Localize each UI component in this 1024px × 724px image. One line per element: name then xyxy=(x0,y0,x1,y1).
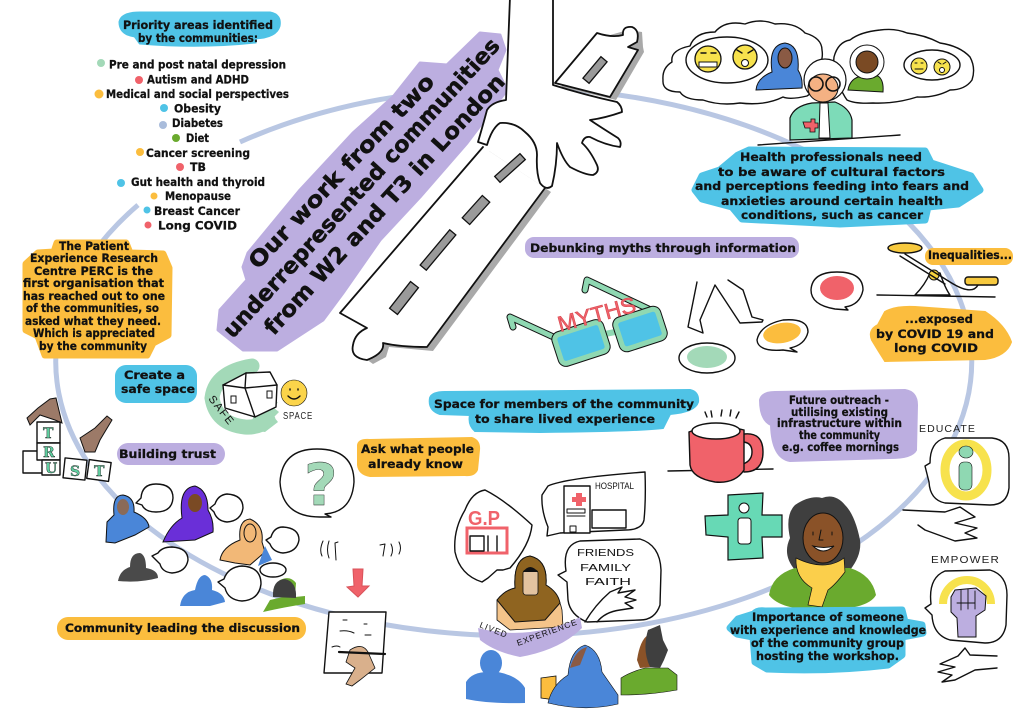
lived experience banner: EXPERIENCE xyxy=(515,617,579,648)
red down arrow xyxy=(347,569,369,597)
create a safe space label: safe space xyxy=(121,382,195,396)
left thought cloud xyxy=(663,21,822,104)
priority areas list: Autism and ADHD xyxy=(147,72,249,86)
coffee mug xyxy=(668,410,773,482)
title banner: Our work from two xyxy=(244,70,440,274)
safe space illustration xyxy=(206,366,313,432)
PERC callout: Which is appreciated xyxy=(33,326,155,340)
exposed by COVID callout: long COVID xyxy=(894,341,978,355)
future outreach callout: Future outreach - xyxy=(789,393,889,407)
create a safe space label xyxy=(115,365,197,403)
myths glasses: MYTHS xyxy=(555,292,639,337)
woman in blue hijab xyxy=(756,43,802,90)
GP speech bubble: G.P xyxy=(468,508,500,530)
friends family faith speech bubble: FAITH xyxy=(585,576,631,588)
road shadow xyxy=(346,151,551,364)
right inner cloud xyxy=(904,50,960,80)
priority areas list: Menopause xyxy=(165,189,231,203)
lived experience banner xyxy=(478,617,582,657)
myth speech bubbles xyxy=(679,272,863,373)
future outreach callout: infrastructure within xyxy=(777,416,902,430)
road fill xyxy=(340,147,545,360)
doctor xyxy=(758,59,900,145)
exposed by COVID callout: ...exposed xyxy=(905,312,973,326)
building trust label xyxy=(117,443,225,465)
hand and arm xyxy=(478,0,622,188)
health professionals callout: anxieties around certain health xyxy=(721,194,943,208)
health professionals callout: and perceptions feeding into fears and xyxy=(695,179,969,193)
title banner: underrepresented communities xyxy=(219,34,505,343)
priority areas list xyxy=(94,58,289,232)
importance of host callout: of the community group xyxy=(751,636,904,650)
ask what people know label xyxy=(357,437,480,477)
brown hands xyxy=(27,398,62,425)
PERC callout: of the communities, so xyxy=(26,301,159,315)
community leading label xyxy=(57,617,306,640)
person in dark xyxy=(118,553,158,582)
priority areas list: Diabetes xyxy=(172,116,223,130)
block letters: U xyxy=(45,461,57,477)
woman in orange xyxy=(220,519,265,565)
priority areas list: Breast Cancer xyxy=(154,204,240,218)
PERC callout: asked what they need. xyxy=(25,314,161,328)
person in green xyxy=(263,578,305,612)
block letters: T xyxy=(43,426,54,442)
future outreach callout: utilising existing xyxy=(791,405,888,419)
PERC callout: first organisation that xyxy=(23,276,164,290)
priority areas list: Gut health and thyroid xyxy=(131,175,265,189)
debunking myths label: Debunking myths through information xyxy=(530,241,796,255)
notepad with writing hand xyxy=(324,612,386,686)
friends family faith speech bubble: FRIENDS xyxy=(577,547,634,559)
right thought cloud xyxy=(834,29,974,103)
facilitator woman xyxy=(769,497,876,610)
block letters: R xyxy=(43,445,55,461)
emoji: shocked xyxy=(733,45,757,69)
lived experience banner: LIVED xyxy=(478,620,509,640)
trust blocks xyxy=(23,398,112,481)
space for lived experience callout xyxy=(430,390,698,432)
left inner cloud xyxy=(686,37,768,83)
ask what people know label: Ask what people xyxy=(361,442,474,456)
future outreach callout: the community xyxy=(799,428,880,442)
priority areas list: Pre and post natal depression xyxy=(109,58,286,72)
woman in purple xyxy=(163,486,213,542)
future outreach callout xyxy=(760,390,917,461)
safe space illustration: SAFE xyxy=(206,393,236,428)
information cross icon xyxy=(705,493,782,560)
road edges xyxy=(340,147,545,360)
debunking myths label xyxy=(525,237,799,258)
block letters: T xyxy=(94,464,105,480)
PERC callout: The Patient xyxy=(59,239,129,253)
empower bubble with fist icon xyxy=(925,570,1007,643)
inequalities label: Inequalities... xyxy=(928,248,1012,262)
exposed by COVID callout xyxy=(871,307,1011,361)
question speech bubble xyxy=(280,449,354,519)
health professionals callout xyxy=(695,150,980,224)
building trust label: Building trust xyxy=(119,447,217,461)
health professionals callout: conditions, such as cancer xyxy=(741,208,923,222)
empower label: EMPOWER xyxy=(931,555,1000,566)
priority areas list: TB xyxy=(190,160,206,174)
journey ring xyxy=(56,88,972,636)
audience member in blue hijab xyxy=(541,645,618,708)
friends family faith speech bubble: FAMILY xyxy=(580,562,631,574)
man with green jumper xyxy=(848,45,884,92)
woman in blue xyxy=(106,495,149,543)
PERC callout: by the community xyxy=(39,339,147,353)
importance of host callout: with experience and knowledge xyxy=(730,623,926,637)
future outreach callout: e.g. coffee mornings xyxy=(782,440,899,454)
person in blue xyxy=(180,575,225,606)
block letters: S xyxy=(70,464,80,480)
health professionals callout: to be aware of cultural factors xyxy=(718,165,945,179)
PERC callout xyxy=(23,239,169,355)
blocks xyxy=(23,451,43,473)
educate bubble with info icon xyxy=(925,438,1009,505)
person in brown hijab xyxy=(497,556,563,630)
space for lived experience callout: to share lived experience xyxy=(475,412,655,426)
hospital speech bubble xyxy=(542,472,645,536)
safe space illustration: SPACE xyxy=(283,411,313,422)
priority areas heading: by the communities: xyxy=(138,31,258,45)
hospital speech bubble: HOSPITAL xyxy=(595,481,634,491)
health professionals callout: Health professionals need xyxy=(740,150,922,164)
audience member in blue xyxy=(466,650,525,703)
road and hand illustration xyxy=(340,0,644,364)
priority areas list: Obesity xyxy=(174,102,221,116)
walking legs xyxy=(688,280,763,333)
ask what people know label: already know xyxy=(368,457,463,471)
road upper section xyxy=(561,30,644,100)
community leading label: Community leading the discussion xyxy=(65,621,300,635)
priority areas heading xyxy=(120,13,279,45)
priority areas list: Long COVID xyxy=(158,218,237,232)
title banner: from W2 and T3 in London xyxy=(260,70,511,340)
create a safe space label: Create a xyxy=(124,368,185,382)
PERC callout: Centre PERC is the xyxy=(34,264,153,278)
importance of host callout: hosting the workshop. xyxy=(756,649,899,663)
GP speech bubble xyxy=(455,490,532,582)
doctor with thought clouds xyxy=(663,21,974,145)
PERC callout: has reached out to one xyxy=(23,289,165,303)
importance of host callout: Importance of someone xyxy=(752,610,904,624)
second open hand outline xyxy=(938,648,997,682)
small emoji pair xyxy=(911,58,950,75)
road dashes xyxy=(390,154,525,314)
educate label: EDUCATE xyxy=(919,424,976,435)
priority areas heading: Priority areas identified xyxy=(123,18,273,32)
priority areas list: Cancer screening xyxy=(146,146,250,160)
audience member in green xyxy=(621,625,677,695)
question speech bubble: ? xyxy=(304,451,338,519)
priority areas list: Medical and social perspectives xyxy=(106,87,289,101)
PERC callout: Experience Research xyxy=(30,251,158,265)
space for lived experience callout: Space for members of the community xyxy=(434,397,695,411)
community discussion group xyxy=(106,484,305,612)
myths glasses xyxy=(510,280,666,365)
open hand outline xyxy=(903,507,977,541)
sound marks xyxy=(321,541,400,560)
emoji: neutral xyxy=(695,46,721,72)
speech bubbles xyxy=(136,484,173,512)
block letters xyxy=(43,426,105,480)
see-saw icon xyxy=(877,243,998,297)
exposed by COVID callout: by COVID 19 and xyxy=(876,327,994,341)
friends family faith speech bubble xyxy=(558,539,661,622)
priority areas list: Diet xyxy=(186,131,209,145)
importance of host callout xyxy=(730,610,926,670)
